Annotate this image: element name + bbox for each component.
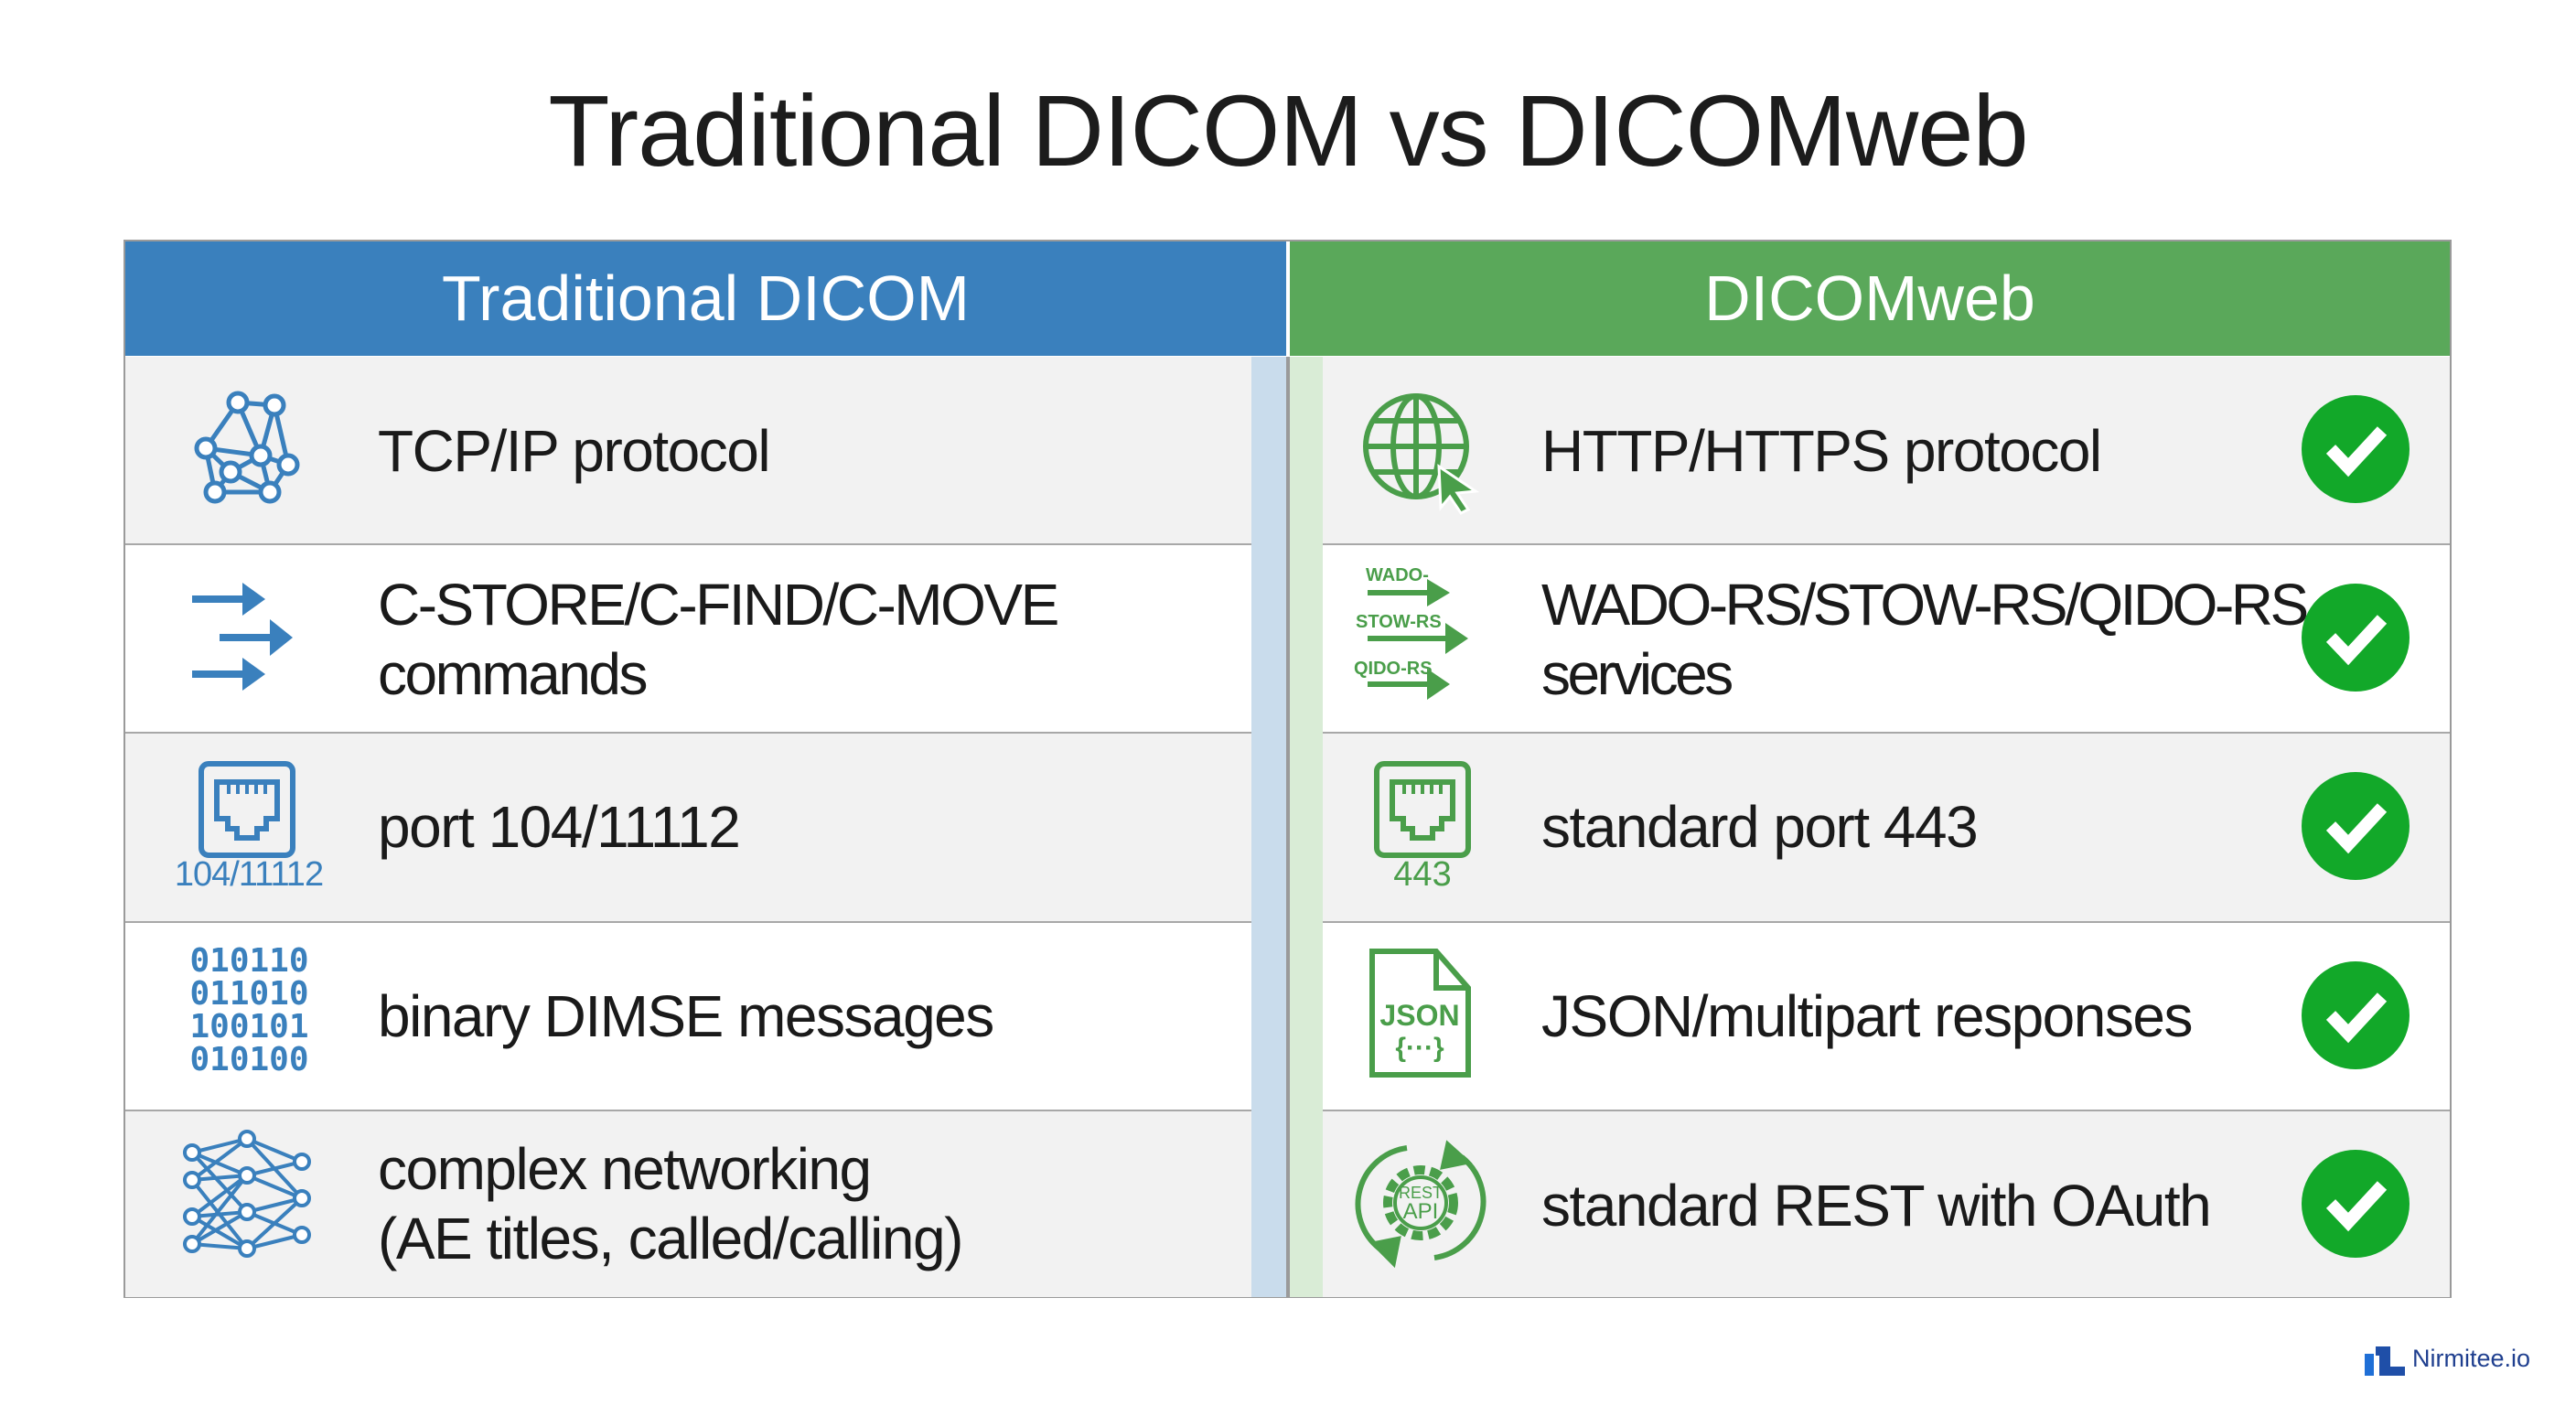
header: Traditional DICOM: Traditional DICOM	[442, 263, 970, 334]
icon: service arrows: WADO-	[1366, 565, 1429, 585]
text: WADO: services	[1541, 641, 1731, 707]
icon: arrows	[192, 583, 293, 691]
icon: neural net	[183, 1130, 311, 1258]
icon: binary: 011010	[189, 975, 309, 1013]
text: WADO	[1541, 572, 2307, 707]
icon: service arrows: STOW-RS	[1356, 612, 1442, 632]
logo: Nirmitee.io	[2412, 1345, 2530, 1372]
icon: REST API: API	[1403, 1199, 1438, 1224]
text: WADO: WADO-RS/STOW-RS/QIDO-RS	[1541, 572, 2306, 638]
row backgrounds	[125, 357, 2450, 1297]
icon: binary: 010100	[189, 1041, 309, 1078]
text: TCP/IP: TCP/IP protocol	[378, 418, 769, 484]
text: binary: binary DIMSE messages	[378, 983, 993, 1049]
text: C-STORE	[378, 572, 1057, 707]
title: Traditional DICOM vs DICOMweb	[548, 75, 2028, 188]
header: DICOMweb: DICOMweb	[1704, 263, 2035, 334]
text: port 443: standard port 443	[1541, 794, 1977, 860]
icon: binary: 010110	[189, 942, 309, 980]
icon: port green	[1374, 761, 1471, 858]
icon: network	[194, 391, 300, 503]
text: JSON: JSON/multipart responses	[1541, 983, 2192, 1049]
icon: port	[199, 761, 295, 858]
icon label: 104/11112: 104/11112	[175, 855, 323, 894]
icon: globe	[1363, 393, 1478, 514]
logo	[2365, 1345, 2530, 1376]
icon: service arrows: QIDO-RS	[1354, 659, 1433, 679]
text: C-STORE: commands	[378, 641, 646, 707]
icon: binary	[189, 942, 309, 1078]
text: C-STORE: C-STORE/C-FIND/C-MOVE	[378, 572, 1057, 638]
icon: service arrows	[1354, 565, 1468, 700]
header: DICOMweb	[1290, 241, 2450, 356]
icon label: 443: 443	[1393, 855, 1452, 894]
text: complex networking	[378, 1136, 962, 1271]
text: REST: standard REST with OAuth	[1541, 1173, 2210, 1239]
text: complex networking: complex networking	[378, 1136, 871, 1202]
icon: REST API: REST	[1399, 1184, 1443, 1202]
icon: REST API	[1355, 1140, 1487, 1268]
table	[123, 240, 2452, 1298]
icon: JSON file: JSON	[1379, 999, 1460, 1032]
text: HTTP: HTTP/HTTPS protocol	[1541, 418, 2101, 484]
icon: JSON file: {···}	[1395, 1033, 1444, 1063]
icon: JSON file	[1369, 949, 1471, 1078]
text: port: port 104/11112	[378, 794, 739, 860]
icon: binary: 100101	[189, 1008, 309, 1046]
header: Traditional DICOM	[125, 241, 1286, 356]
text: complex networking: (AE titles, called/calling)	[378, 1206, 962, 1271]
check icons	[2302, 395, 2410, 1258]
